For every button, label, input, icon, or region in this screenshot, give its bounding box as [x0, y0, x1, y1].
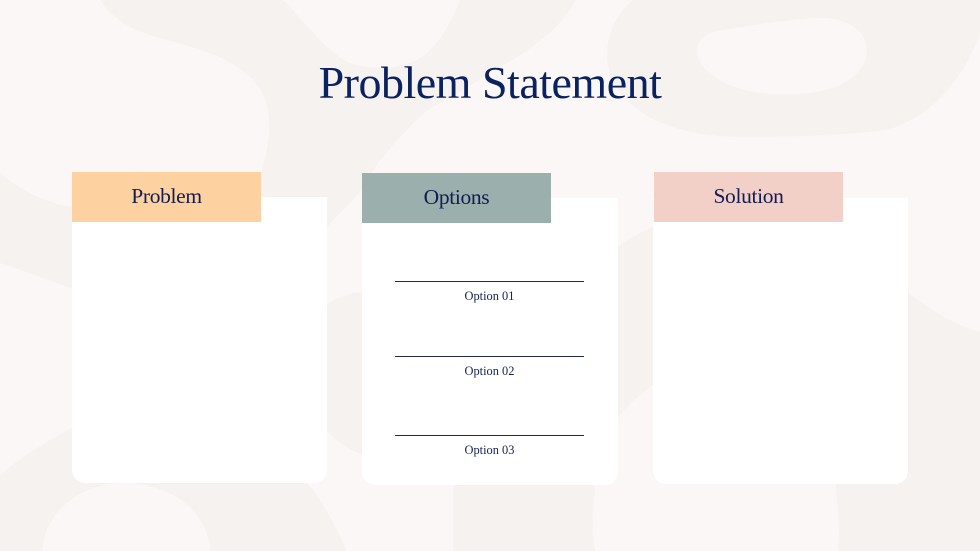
problem heading tab: [72, 172, 261, 222]
panel: solution: [653, 172, 908, 484]
solution heading tab: [654, 172, 843, 222]
panel: problem: [72, 172, 327, 483]
option 02 label: Option 02: [465, 364, 514, 378]
option 02 line: [395, 356, 584, 357]
title: Problem Statement: [319, 57, 661, 108]
option 03 line: [395, 435, 584, 436]
panel: options: [362, 173, 618, 485]
problem heading tab: Problem: [131, 184, 202, 208]
problem card body: [72, 197, 327, 483]
options heading tab: [362, 173, 551, 223]
option 01 line: [395, 281, 584, 282]
options card body: [362, 198, 618, 485]
solution card body: [653, 198, 908, 484]
option 01 label: Option 01: [465, 289, 514, 303]
solution heading tab: Solution: [713, 184, 784, 208]
option 03 label: Option 03: [465, 443, 514, 457]
options heading tab: Options: [424, 185, 489, 209]
